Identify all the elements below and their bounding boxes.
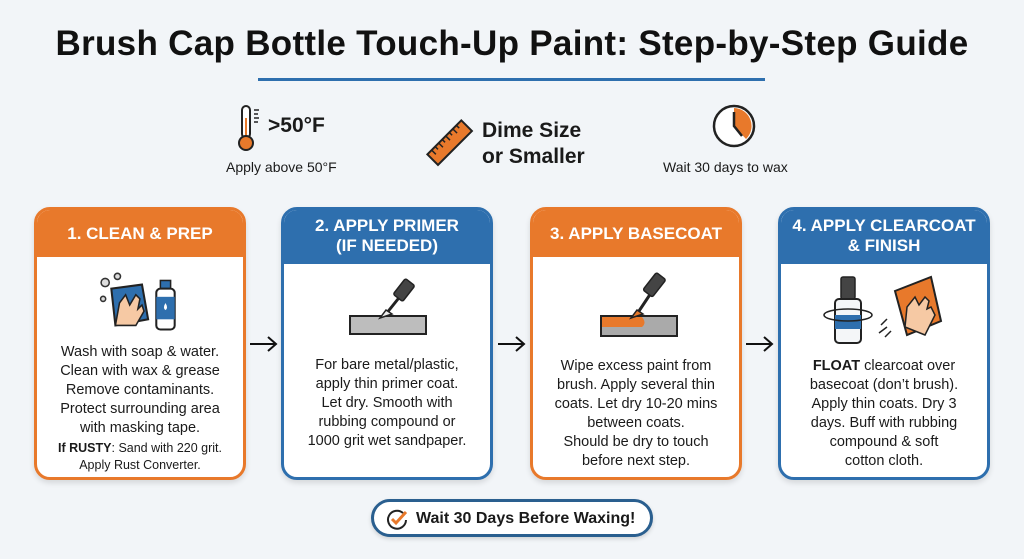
label: >50°F: >50°F [268, 114, 325, 137]
title underline [258, 78, 765, 81]
heading [781, 210, 987, 264]
icon: clearcoat bottle and buffing hand [823, 276, 942, 344]
panel: step 3 [530, 207, 742, 480]
caption: Wait 30 days to wax [663, 159, 788, 175]
panel: step 2 [281, 207, 493, 480]
arrow 2 [498, 336, 526, 352]
body text: days. Buff with rubbing [811, 415, 957, 431]
rust note: If RUSTY: Sand with 220 grit. [58, 441, 222, 455]
body text: Let dry. Smooth with [321, 395, 453, 411]
caption: Apply above 50°F [226, 159, 337, 175]
body text: coats. Let dry 10-20 mins [555, 396, 717, 412]
rust note: Apply Rust Converter. [79, 458, 201, 472]
body text: with masking tape. [80, 420, 200, 436]
body text: FLOAT clearcoat over [813, 358, 955, 374]
icon: brush on gray surface [349, 278, 427, 335]
icon: ruler [426, 119, 474, 166]
body text: Remove contaminants. [66, 382, 214, 398]
callout: wait 30 days [371, 499, 653, 537]
body text: between coats. [587, 415, 685, 431]
heading: 4. APPLY CLEARCOAT [792, 216, 976, 235]
body text [60, 344, 220, 436]
heading [533, 210, 739, 257]
body text: cotton cloth. [845, 453, 923, 469]
body text: apply thin primer coat. [316, 376, 458, 392]
body text: Wash with soap & water. [61, 344, 219, 360]
heading: & FINISH [848, 236, 920, 255]
tip: dime size [426, 119, 585, 168]
body text [555, 358, 717, 469]
callout text: Wait 30 Days Before Waxing! [416, 510, 635, 527]
heading: (IF NEEDED) [336, 236, 438, 255]
icon: check circle [386, 510, 407, 530]
title: Brush Cap Bottle Touch-Up Paint: Step-by-Step Guide [56, 24, 968, 63]
label: or Smaller [482, 145, 585, 168]
heading: 3. APPLY BASECOAT [550, 224, 722, 243]
arrow 1 [250, 336, 278, 352]
body text: 1000 grit wet sandpaper. [308, 433, 466, 449]
rust note [58, 441, 222, 472]
body text: compound & soft [830, 434, 938, 450]
label [482, 119, 585, 168]
body text: brush. Apply several thin [557, 377, 715, 393]
tip: wait to wax [663, 104, 788, 175]
arrow 3 [746, 336, 774, 352]
body text: For bare metal/plastic, [315, 357, 459, 373]
panel: step 1 [34, 207, 246, 480]
label: Dime Size [482, 119, 581, 142]
body text: Wipe excess paint from [561, 358, 711, 374]
panel: step 4 [778, 207, 990, 480]
body text [308, 357, 466, 449]
icon: hand with cloth and bottle [100, 272, 176, 330]
body text [810, 358, 958, 469]
tip: temperature [226, 105, 337, 175]
body text: before next step. [582, 453, 690, 469]
heading: 2. APPLY PRIMER [315, 216, 459, 235]
heading [284, 210, 490, 264]
body text: rubbing compound or [318, 414, 456, 430]
body text: Apply thin coats. Dry 3 [811, 396, 957, 412]
icon: thermometer [238, 105, 259, 151]
icon: clock [712, 104, 756, 148]
heading: 1. CLEAN & PREP [67, 224, 213, 243]
icon: brush on orange painted surface [600, 272, 678, 337]
body text: Clean with wax & grease [60, 363, 220, 379]
body text: Protect surrounding area [60, 401, 220, 417]
heading [37, 210, 243, 257]
body text: basecoat (don’t brush). [810, 377, 958, 393]
body text: Should be dry to touch [563, 434, 709, 450]
